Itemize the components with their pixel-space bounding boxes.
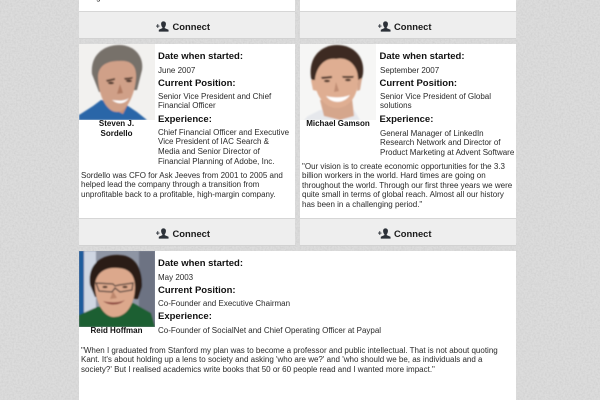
connect button [300,11,516,39]
icon: add connection [378,21,391,32]
heading: date started: Date when started: [158,258,243,268]
heading: current position: Current Position: [158,78,236,88]
button label: Connect [172,228,210,239]
portrait: Reid Hoffman [79,251,155,327]
text: experience: Financial Planning of Adobe, Inc. [158,157,275,166]
panel: Michael Gamson [300,44,516,246]
panel: Reid Hoffman [79,251,516,400]
name: Reid Hoffman: Reid Hoffman [90,326,142,335]
text: experience [158,128,289,166]
connect button [79,218,295,246]
panel: Steven J. Sordello [79,44,295,246]
heading: experience: Experience: [158,311,212,322]
text: position [158,92,272,110]
connect button [79,11,295,39]
text: position: Co-Founder and Executive Chairman [158,298,290,308]
text: date: May 2003 [158,272,193,282]
text: biography [81,170,283,198]
button label: Connect [172,21,210,32]
name: Steven J. Sordello [99,119,134,138]
text: position [380,92,491,110]
button label: Connect [394,21,432,32]
portrait: Michael Gamson [300,44,376,120]
text: biography: helped lead the company through a transition from [81,180,259,189]
text: position: solutions [380,101,412,110]
heading: experience: Experience: [380,114,433,125]
text: biography: unprofitable back to a profitable, high-margin company. [81,190,276,198]
text: position: Senior Vice President of Global [380,92,491,100]
text: quote: has been in a challenging period." [302,200,422,209]
name: Steven J. Sordello: Steven J. [99,119,134,128]
text: quote: Kant. It's about holding up a lens to society and asking 'who are we?' and 'who should we be, as individuals and a [81,355,482,364]
icon: add connection [156,228,169,239]
text: position: Senior Vice President and Chief [158,92,271,100]
name: Michael Gamson: Michael Gamson [306,119,370,128]
text: quote: society?' But I realised academics write books that 50 or 60 people read and I wanted more impact." [81,364,435,374]
text: experience: Research Network and Director of [380,138,500,147]
text: experience: General Manager of LinkedIn [380,128,484,138]
text: experience: Chief Financial Officer and Executive [158,128,289,136]
button label: Connect [394,228,432,239]
text: biography: Sordello was CFO for Ask Jeeves from 2001 to 2005 and [81,170,283,180]
icon: add connection [156,21,169,32]
text: date: September 2007 [380,66,439,74]
text: experience: Co-Founder of SocialNet and Chief Operating Officer at Paypal [158,326,381,334]
text: experience: Media and Senior Director of [158,147,260,156]
text: quote: billion workers in the world. Hard times are going on [302,171,486,180]
heading: current position: Current Position: [158,284,236,296]
text: quote: throughout the world. Through our first three years we were [302,181,512,190]
text: quote: quite small in terms of global reach. Almost all our history [302,190,504,199]
panel: top right card remainder [300,0,516,39]
text: quote: "When I graduated from Stanford my plan was to become a professor and public intellectual. That is not about quoting [81,346,498,354]
name: Steven J. Sordello: Sordello [100,129,132,138]
text: experience: Product Marketing at Advent Software [380,148,514,156]
text: experience [380,128,514,156]
icon: add connection [378,228,391,239]
text: quote [302,162,512,209]
heading: date started: Date when started: [380,51,464,62]
text: quote [81,346,498,374]
text: position: Financial Officer [158,101,216,110]
text: date: June 2007 [158,66,195,74]
heading: date started: Date when started: [158,51,243,62]
text: quote: "Our vision is to create economic opportunities for the 3.3 [302,162,505,170]
heading: experience: Experience: [158,114,212,124]
panel: top left card remainder [79,0,295,39]
connect button [300,218,516,246]
portrait: Steven Sordello [79,44,155,120]
heading: current position: Current Position: [380,78,457,88]
text: experience: Vice President of IAC Search & [158,137,269,146]
